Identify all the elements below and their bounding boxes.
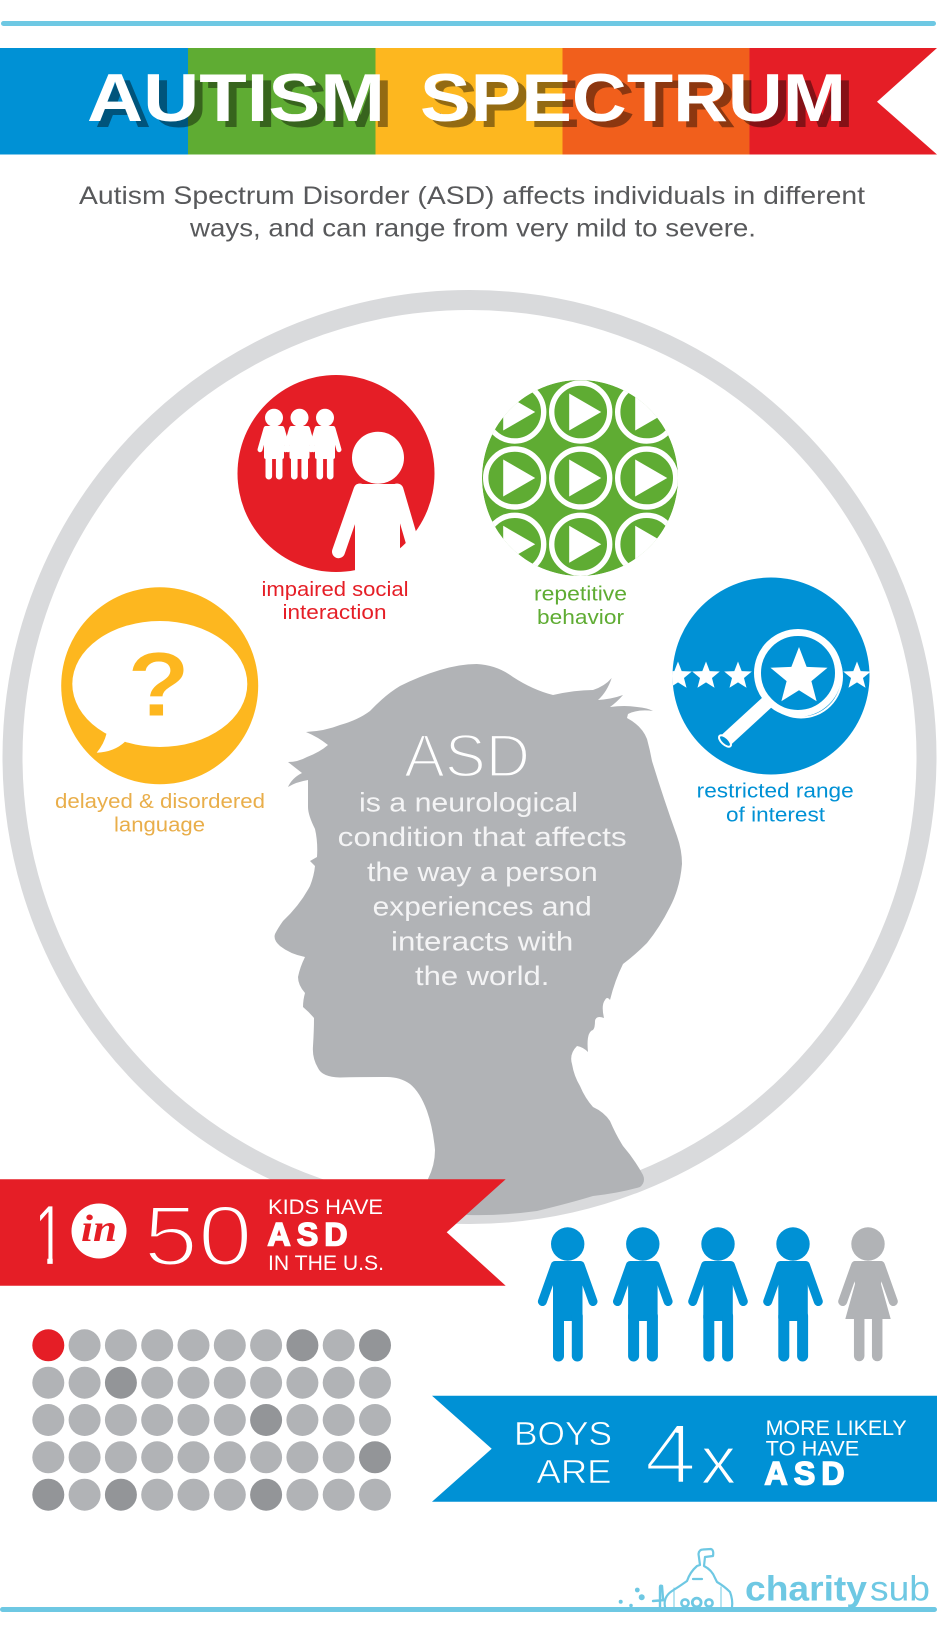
statistic: 4x: x <box>700 1422 736 1498</box>
statistic: 1 in 50: 50 <box>144 1189 252 1284</box>
label <box>534 583 627 629</box>
head description: condition that affects <box>338 822 627 852</box>
wordmark <box>745 1570 930 1609</box>
subtitle <box>79 182 865 242</box>
label: restricted range <box>697 780 854 803</box>
icon: grid of play buttons <box>482 380 678 576</box>
large ring <box>12 300 926 1214</box>
wordmark: charity <box>745 1570 868 1609</box>
title <box>87 60 846 136</box>
statistic: 1 in 50: in <box>81 1208 117 1250</box>
label: interaction <box>282 601 386 624</box>
head description: the way a person <box>367 857 598 887</box>
subtitle: ways, and can range from very mild to severe. <box>189 214 756 242</box>
panel: repetitive behavior <box>482 380 678 629</box>
icon: girl <box>843 1227 893 1356</box>
label: behavior <box>537 606 624 629</box>
title banner <box>0 48 937 154</box>
icon: speech bubble with question mark: ? <box>127 634 190 736</box>
label: repetitive <box>534 583 627 606</box>
text: boys are: ARE <box>536 1453 612 1490</box>
head description <box>338 788 627 991</box>
title shadow <box>95 66 854 142</box>
label: delayed & disordered <box>55 790 265 813</box>
head silhouette <box>275 664 682 1215</box>
caption <box>764 1417 907 1492</box>
wordmark: sub <box>870 1570 930 1609</box>
head description: interacts with <box>391 926 573 956</box>
icon: submarine <box>619 1549 732 1607</box>
caption <box>268 1196 384 1275</box>
panel: impaired social interaction <box>238 375 434 624</box>
title shadow: AUTISM <box>95 66 393 142</box>
icon: speech bubble with question mark <box>61 587 258 784</box>
bottom rule <box>0 1607 937 1612</box>
head description: the world. <box>415 961 549 991</box>
caption: MORE LIKELY <box>766 1417 907 1440</box>
panel: delayed and disordered language <box>55 587 265 837</box>
icon: group of three people <box>260 409 339 476</box>
caption: ASD <box>268 1216 348 1252</box>
statistic: 1 in 50: 1 <box>34 1188 64 1284</box>
head description: is a neurological <box>359 788 578 818</box>
head heading: ASD: ASD <box>404 722 530 790</box>
title shadow: SPECTRUM <box>428 66 854 142</box>
blue ribbon: boys 4x <box>432 1396 937 1502</box>
icon: lone person <box>338 432 414 575</box>
statistic: 1 in 50 <box>28 1188 252 1284</box>
text: boys are <box>514 1415 612 1490</box>
statistic: 4x <box>644 1408 736 1502</box>
top rule <box>1 21 936 26</box>
subtitle: Autism Spectrum Disorder (ASD) affects individuals in different <box>79 182 865 210</box>
caption: IN THE U.S. <box>268 1252 384 1275</box>
head description: experiences and <box>373 892 592 922</box>
label <box>55 790 265 837</box>
red ribbon: 1 in 50 <box>0 1179 506 1286</box>
pictogram: four boys and one girl <box>542 1227 893 1356</box>
label: language <box>114 814 205 837</box>
caption: KIDS HAVE <box>268 1196 383 1219</box>
title: AUTISM <box>87 60 385 136</box>
text: boys are: BOYS <box>514 1415 612 1452</box>
icon: magnifier over stars <box>664 578 871 774</box>
caption: ASD <box>764 1456 844 1492</box>
label <box>262 578 408 624</box>
caption: TO HAVE <box>766 1438 859 1461</box>
title: SPECTRUM <box>420 60 846 136</box>
panel: restricted range of interest <box>664 578 871 827</box>
statistic: 4x: 4 <box>644 1408 696 1502</box>
label: of interest <box>726 804 825 827</box>
dot grid: 1 in 50 <box>32 1329 391 1511</box>
label: impaired social <box>262 578 408 601</box>
logo: charitysub <box>619 1549 930 1609</box>
label <box>697 780 854 827</box>
